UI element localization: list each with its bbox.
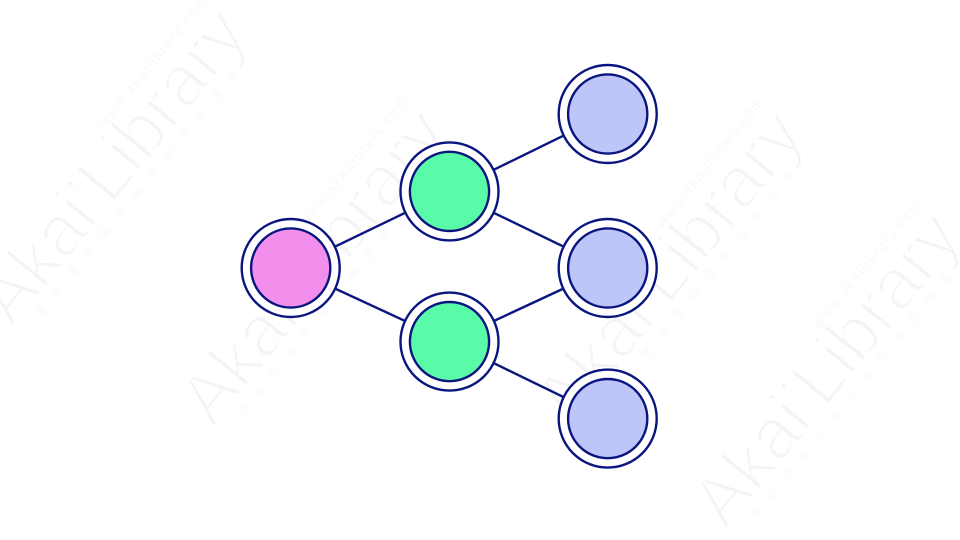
watermark 2: Akai’Library — [163, 94, 463, 438]
middle node: lower green — [400, 293, 498, 391]
watermark 3: Akai’Library — [519, 95, 819, 439]
leaf node: middle lavender — [559, 219, 657, 317]
watermark 2: www.akailibrary.com — [296, 94, 410, 230]
leaf node: bottom lavender — [559, 370, 657, 468]
root node: pink — [242, 219, 340, 317]
watermark 3: www.akailibrary.com — [652, 95, 766, 231]
leaf node: top lavender — [559, 65, 657, 163]
watermark 4: www.akailibrary.com — [809, 197, 923, 333]
middle node: upper green — [400, 142, 498, 240]
connector lines — [291, 114, 608, 419]
